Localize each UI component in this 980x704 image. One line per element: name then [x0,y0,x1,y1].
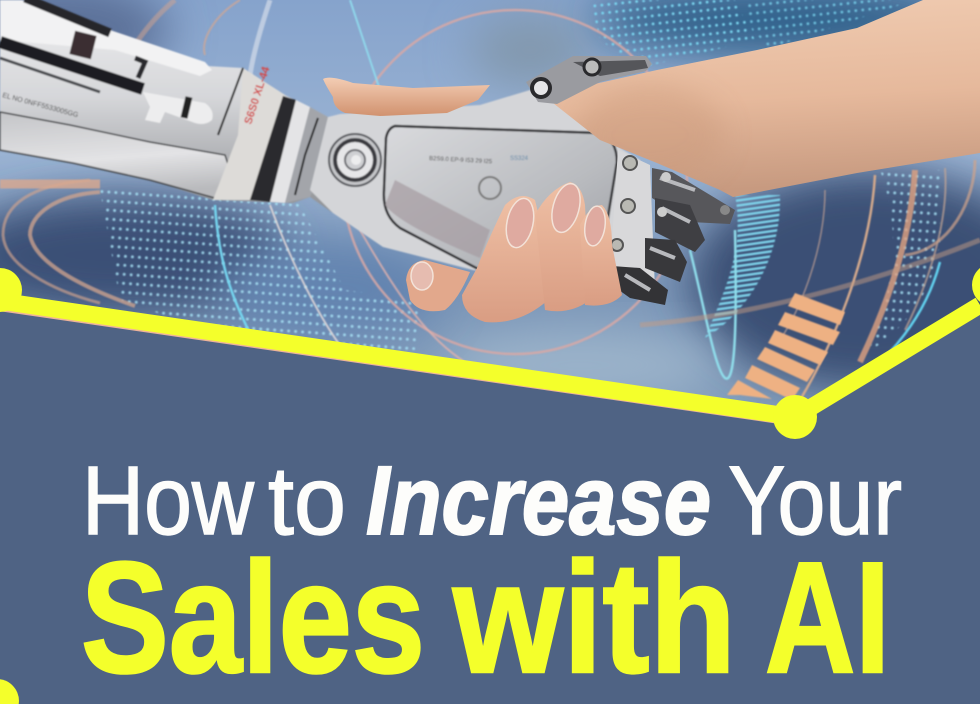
hand display panel: B2S9.0 EP-9 I53 29 I25 [429,156,493,165]
human hand: thumb and fingers gripping [406,180,622,322]
title line two: with [452,530,736,704]
lower forearm plate [0,112,230,200]
hand display panel [384,126,617,270]
palm and back of hand [310,90,640,290]
holographic rings [0,0,980,400]
robot fingers [611,150,735,305]
wrist rings: S6S0 XL-44 [242,64,273,126]
node bottom left [0,679,19,704]
forearm body [0,0,333,213]
title line one: Increase [366,446,711,555]
upper tubes and black rods [0,0,212,92]
robot arm and hand [0,0,640,290]
node centre [773,395,817,439]
round dial [329,134,381,186]
background: holographic globe scene [0,0,980,440]
title line one: Your [728,446,902,555]
human forearm [553,0,980,197]
title line two [81,530,890,704]
title line one: How [82,446,255,555]
node right [972,263,980,307]
node left [0,268,22,312]
fingernails [411,180,608,290]
piston joint [143,92,213,124]
hand display panel: SS324 [510,156,529,162]
orange staircase graphic [727,293,845,400]
globe dot grids [100,0,942,352]
robot thumb [526,56,652,104]
title line one [82,446,902,555]
title line two: Sales [81,530,425,704]
yellow trend line with nodes [0,263,980,704]
wrist rings [213,64,328,203]
title line one: to [268,446,346,555]
title line two: AI [765,530,890,704]
human hand: index finger over the robot palm [323,78,490,116]
bottom panel [0,306,980,704]
serial label: EL NO 0NFF5533005GG [1,92,79,119]
